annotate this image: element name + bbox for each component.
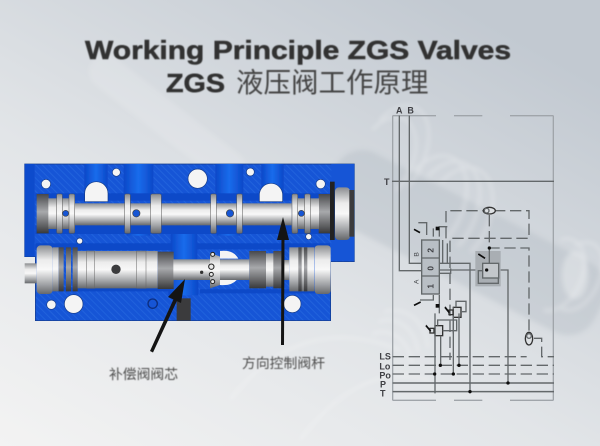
background: ghost spool shapes	[82, 48, 600, 440]
schematic border	[393, 116, 553, 400]
white bores	[41, 168, 325, 313]
relief valve lower	[426, 313, 459, 393]
label: compensator spool: 补偿阀阀芯	[109, 367, 178, 382]
schematic labels: B	[407, 106, 414, 116]
arrow: to compensator spool	[150, 279, 185, 352]
panel: valve cross-section	[25, 164, 354, 321]
upper spool: directional control stem	[37, 194, 331, 233]
schematic labels: T	[380, 389, 386, 399]
schematic labels: A	[396, 106, 403, 116]
relief valve upper	[445, 301, 466, 333]
schematic labels: 0	[425, 266, 435, 271]
schematic labels: LS	[379, 352, 391, 362]
internal channels	[35, 193, 332, 293]
pressure reducing block	[475, 248, 501, 286]
right end cap	[330, 182, 354, 240]
small outlined port	[148, 299, 157, 308]
handle arrows	[414, 229, 485, 331]
valve body	[25, 164, 354, 321]
label: directional control stem: 方向控制阀杆	[242, 356, 325, 371]
schematic labels: 1	[425, 284, 435, 289]
lower spool: compensator	[25, 245, 331, 294]
schematic labels: P	[380, 379, 386, 389]
schematic labels: Po	[379, 370, 391, 380]
title line 2: ZGS Chinese: ZGS	[166, 68, 225, 98]
drain passage	[177, 298, 191, 321]
flow ports	[84, 164, 284, 295]
main lines P T bottom	[393, 383, 554, 392]
check valves	[483, 207, 533, 345]
schematic labels: Lo	[379, 361, 391, 371]
title line 2: ZGS Chinese: 液压阀工作原理	[236, 67, 428, 98]
main lines A B T	[392, 116, 554, 392]
schematic labels: T	[384, 177, 390, 187]
panel: hydraulic schematic	[379, 106, 554, 400]
schematic labels: 2	[425, 248, 435, 253]
directional valve block	[418, 223, 451, 313]
pilot dashed lines	[393, 211, 554, 374]
title	[85, 35, 511, 98]
schematic labels	[379, 106, 435, 399]
schematic labels: A	[414, 279, 421, 284]
arrow: to directional control stem	[277, 217, 289, 345]
title line 1: English: Working Principle ZGS Valves	[85, 35, 511, 65]
schematic labels: B	[414, 252, 421, 257]
junction dots	[433, 227, 510, 393]
